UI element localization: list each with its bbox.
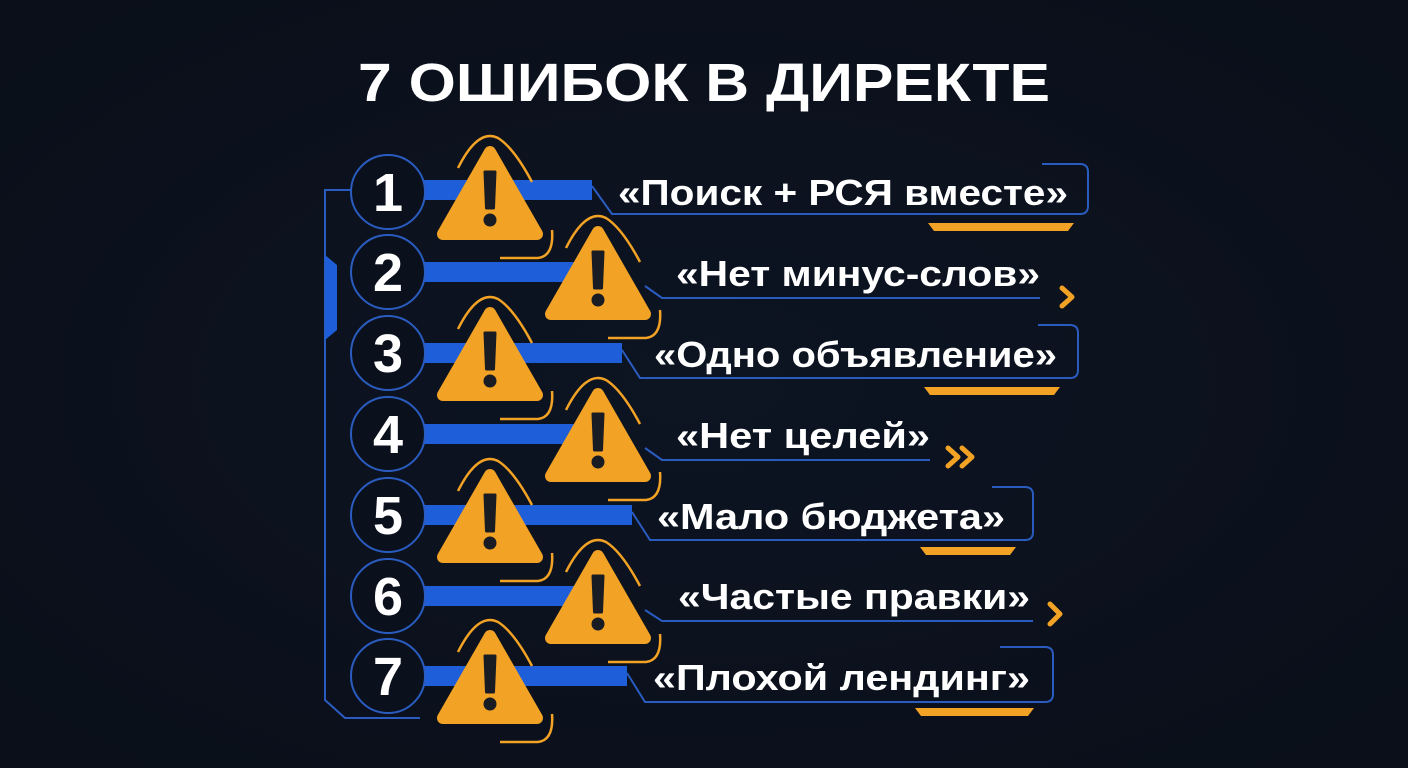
row 6 bbox=[351, 540, 1060, 662]
row 4: «Нет целей» bbox=[676, 415, 930, 456]
row 6: 6 bbox=[373, 567, 403, 627]
row 2: 2 bbox=[373, 243, 403, 303]
row 1: 1 bbox=[373, 163, 403, 223]
row 7 bbox=[351, 620, 1053, 742]
row 3: 3 bbox=[373, 324, 403, 384]
row 5: «Мало бюджета» bbox=[657, 496, 1005, 537]
row 5: 5 bbox=[373, 486, 403, 546]
row 2 bbox=[351, 216, 1072, 338]
row 3: «Одно объявление» bbox=[654, 334, 1057, 375]
row 1: «Поиск + РСЯ вместе» bbox=[618, 172, 1068, 213]
row 4: 4 bbox=[373, 405, 403, 465]
row 2: «Нет минус-слов» bbox=[676, 253, 1040, 294]
title: 7 ОШИБОК В ДИРЕКТЕ bbox=[358, 53, 1050, 113]
row 7: 7 bbox=[373, 647, 403, 707]
row 4 bbox=[351, 378, 972, 500]
row 6: «Частые правки» bbox=[678, 576, 1030, 617]
row 3 bbox=[351, 297, 1078, 419]
row 1 bbox=[351, 136, 1088, 258]
row 5 bbox=[351, 459, 1033, 581]
row 7: «Плохой лендинг» bbox=[653, 657, 1030, 698]
left bracket connector bbox=[325, 190, 420, 718]
